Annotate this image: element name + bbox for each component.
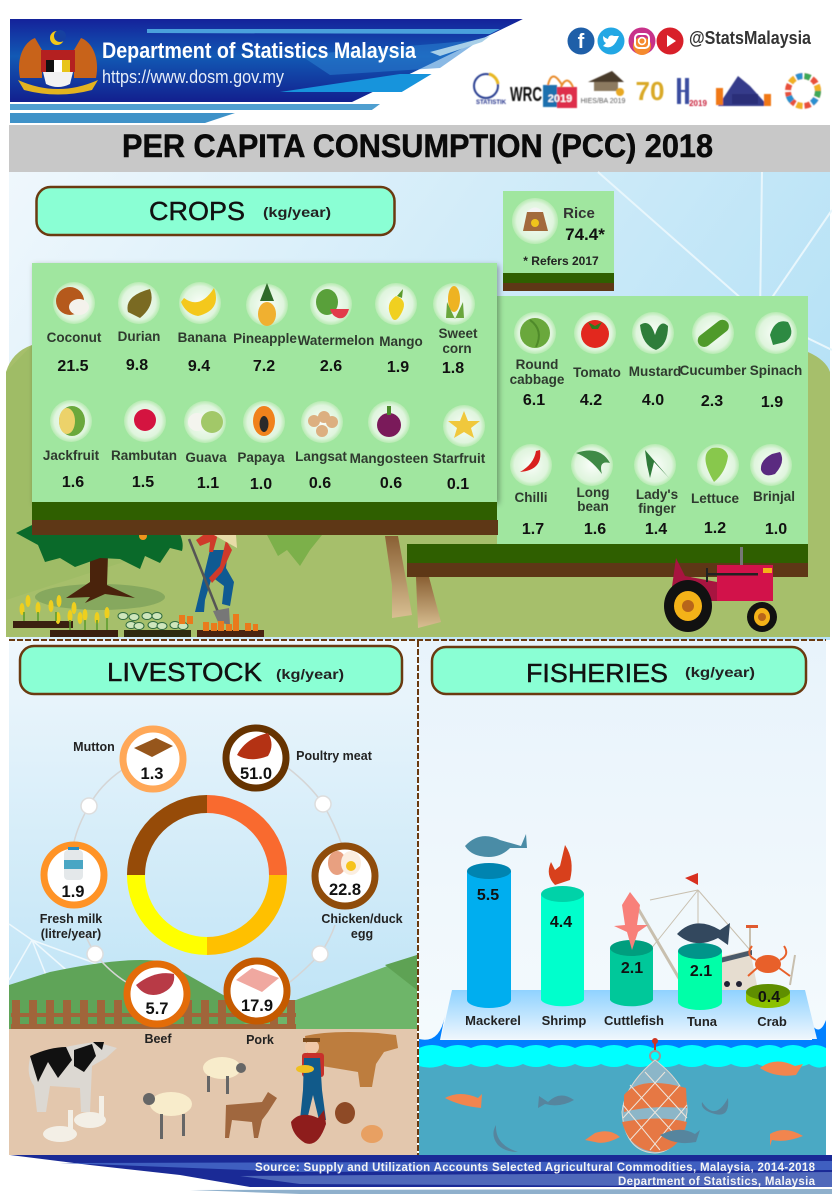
fresh milk xyxy=(40,845,104,941)
scene: farmer with hoe xyxy=(189,533,237,625)
bar chart: fisheries xyxy=(465,834,790,1029)
partner logos row: WRC xyxy=(510,84,542,106)
lady's finger: 1.4 xyxy=(645,521,667,538)
rambutan xyxy=(111,400,177,491)
credit text: Department of Statistics, Malaysia xyxy=(618,1176,816,1188)
lettuce xyxy=(691,444,739,537)
bar: crab: Crab xyxy=(757,1014,787,1029)
long bean: 1.6 xyxy=(584,521,606,538)
heading: crops: CROPS xyxy=(149,196,245,226)
chilli: Chilli xyxy=(514,490,548,505)
sweet corn: corn xyxy=(442,341,472,356)
panel: rice xyxy=(503,191,614,291)
beef: 5.7 xyxy=(146,1000,168,1018)
partner logos row: 2019 xyxy=(548,93,572,105)
social media icons: f xyxy=(578,31,585,53)
round cabbage: 6.1 xyxy=(523,392,545,409)
papaya: Papaya xyxy=(237,450,285,465)
mangosteen: 0.6 xyxy=(380,475,402,492)
sweet corn: 1.8 xyxy=(442,360,464,377)
fish swimming xyxy=(445,1061,803,1152)
bar: shrimp: 4.4 xyxy=(550,914,572,931)
hens xyxy=(291,1102,383,1144)
heading: livestock: LIVESTOCK xyxy=(107,657,263,687)
dashed dividers xyxy=(9,640,826,1155)
partner logos row: STATISTIK xyxy=(476,100,507,106)
chicken/duck egg: 22.8 xyxy=(329,881,361,899)
poultry meat: 51.0 xyxy=(240,765,272,783)
bar: mackerel: Mackerel xyxy=(465,1013,521,1028)
mustard: 4.0 xyxy=(642,392,664,409)
jackfruit: 1.6 xyxy=(62,474,84,491)
mango: Mango xyxy=(379,334,423,349)
partner logos row: 2019 xyxy=(689,99,707,108)
chicken/duck egg xyxy=(315,846,403,941)
brown cow xyxy=(305,1032,398,1087)
spinach: 1.9 xyxy=(761,394,783,411)
brinjal xyxy=(750,444,795,538)
website: https://www.dosm.gov.my xyxy=(102,67,284,87)
mutton: 1.3 xyxy=(141,765,163,783)
animals xyxy=(29,1032,398,1144)
bar: crab: 0.4 xyxy=(758,989,780,1006)
fresh milk: 1.9 xyxy=(62,883,84,901)
fish net with hook xyxy=(622,1038,687,1153)
mutton xyxy=(73,729,183,789)
water xyxy=(419,1015,826,1155)
papaya: 1.0 xyxy=(250,476,272,493)
sheep xyxy=(143,1092,192,1139)
chilli xyxy=(510,444,552,538)
long bean xyxy=(571,444,613,538)
beef: Beef xyxy=(144,1032,172,1046)
round cabbage: cabbage xyxy=(510,372,565,387)
fishing boat xyxy=(636,873,795,1000)
durian: 9.8 xyxy=(126,357,148,374)
farm field xyxy=(6,345,830,637)
jackfruit xyxy=(43,400,100,491)
heading: livestock xyxy=(20,646,402,694)
tomato: Tomato xyxy=(573,365,621,380)
bar: tuna xyxy=(677,923,730,1029)
social handle: @StatsMalaysia xyxy=(689,28,812,48)
starfruit: Starfruit xyxy=(433,451,486,466)
poultry meat xyxy=(226,728,373,788)
spinach xyxy=(750,312,802,411)
guava xyxy=(184,401,227,492)
bar: tuna: Tuna xyxy=(687,1014,718,1029)
heading: fisheries: (kg/year) xyxy=(685,664,755,680)
cucumber xyxy=(680,312,747,410)
long bean: bean xyxy=(577,499,609,514)
watermelon: 2.6 xyxy=(320,358,342,375)
bar: tuna: 2.1 xyxy=(690,963,712,980)
rice value: Rice xyxy=(563,205,595,222)
heading: crops xyxy=(36,187,394,235)
langsat: Langsat xyxy=(295,449,347,464)
panel: vegetables xyxy=(407,296,808,577)
fresh milk: Fresh milk xyxy=(40,912,102,926)
langsat xyxy=(295,401,347,492)
partner logos row: 70 xyxy=(636,76,664,106)
coconut xyxy=(47,282,102,375)
icon: tractor xyxy=(664,547,777,632)
mango xyxy=(375,283,423,376)
tomato xyxy=(573,312,621,409)
heading: fisheries xyxy=(432,647,806,694)
fresh milk: (litre/year) xyxy=(41,927,101,941)
farmer with tray xyxy=(296,1038,326,1120)
mutton: Mutton xyxy=(73,740,115,754)
chilli: 1.7 xyxy=(522,521,544,538)
rambutan: Rambutan xyxy=(111,448,177,463)
source text: Source: Supply and Utilization Accounts Selected Agricultural Commodities, Malaysia, 2014-2018 xyxy=(255,1162,816,1174)
bar: mackerel: 5.5 xyxy=(477,887,499,904)
scene: palm tree xyxy=(267,535,441,628)
cucumber: Cucumber xyxy=(680,363,747,378)
panel: livestock xyxy=(9,640,417,1155)
rice value: 74.4* xyxy=(565,225,605,244)
footer band xyxy=(10,1155,832,1194)
panel: fisheries xyxy=(418,640,826,1040)
title: PER CAPITA CONSUMPTION (PCC) 2018 xyxy=(122,128,713,164)
pork: Pork xyxy=(246,1033,274,1047)
pork xyxy=(227,961,287,1047)
chicken/duck egg: Chicken/duck xyxy=(321,912,403,926)
scene: crop beds xyxy=(13,595,264,637)
hills xyxy=(9,955,417,1029)
bar: cuttlefish: 2.1 xyxy=(621,960,643,977)
lettuce: Lettuce xyxy=(691,491,739,506)
sweet corn xyxy=(433,283,478,377)
panel: fruits xyxy=(32,263,498,535)
coconut: 21.5 xyxy=(57,358,89,375)
mango: 1.9 xyxy=(387,359,409,376)
bar: mackerel xyxy=(465,834,527,1028)
banana: Banana xyxy=(178,330,227,345)
durian xyxy=(118,282,160,374)
pineapple xyxy=(233,283,297,375)
mangosteen xyxy=(350,401,428,492)
brinjal: Brinjal xyxy=(753,489,795,504)
heading: crops: (kg/year) xyxy=(263,204,331,220)
mustard xyxy=(629,312,681,409)
sheep 2 xyxy=(203,1057,246,1094)
partner logos row xyxy=(474,71,818,108)
durian: Durian xyxy=(118,329,160,344)
partner logos row: HIES/BA 2019 xyxy=(581,98,625,105)
round cabbage: Round xyxy=(516,357,558,372)
heading: fisheries: FISHERIES xyxy=(526,658,668,688)
banana: 9.4 xyxy=(188,358,210,375)
geese xyxy=(43,1096,106,1142)
rambutan: 1.5 xyxy=(132,474,154,491)
heading: livestock: (kg/year) xyxy=(276,666,344,682)
jackfruit: Jackfruit xyxy=(43,448,100,463)
sweet corn: Sweet xyxy=(438,326,478,341)
beef xyxy=(127,964,187,1046)
mangosteen: Mangosteen xyxy=(350,451,428,466)
ground xyxy=(9,1029,417,1155)
title bar xyxy=(9,125,830,172)
spinach: Spinach xyxy=(750,363,802,378)
starfruit xyxy=(433,405,486,493)
fence xyxy=(11,1000,296,1029)
starfruit: 0.1 xyxy=(447,476,469,493)
cucumber: 2.3 xyxy=(701,393,723,410)
round cabbage xyxy=(510,312,565,409)
social media icons xyxy=(568,28,684,55)
coconut: Coconut xyxy=(47,330,102,345)
brinjal: 1.0 xyxy=(765,521,787,538)
mustard: Mustard xyxy=(629,364,681,379)
pineapple: Pineapple xyxy=(233,331,297,346)
long bean: Long xyxy=(576,485,610,500)
connecting arc xyxy=(74,768,342,982)
banana xyxy=(178,282,227,375)
lady's finger: finger xyxy=(638,501,676,516)
chicken/duck egg: egg xyxy=(351,927,373,941)
organisation name: Department of Statistics Malaysia xyxy=(102,38,417,63)
lettuce: 1.2 xyxy=(704,520,726,537)
donut chart xyxy=(136,804,278,946)
bar: shrimp xyxy=(541,845,586,1028)
tomato: 4.2 xyxy=(580,392,602,409)
pork: 17.9 xyxy=(241,997,273,1015)
crops section background xyxy=(6,172,832,640)
guava: 1.1 xyxy=(197,475,219,492)
scene: orange tree xyxy=(16,525,183,610)
emblem: coat of arms xyxy=(18,30,98,94)
bar: shrimp: Shrimp xyxy=(542,1013,586,1028)
rice value xyxy=(563,205,605,244)
guava: Guava xyxy=(185,450,227,465)
poultry meat: Poultry meat xyxy=(296,749,373,763)
bar: cuttlefish xyxy=(604,892,664,1028)
rice footnote: * Refers 2017 xyxy=(523,254,599,268)
bar: cuttlefish: Cuttlefish xyxy=(604,1013,664,1028)
bar: crab xyxy=(746,946,790,1029)
icon: rice sack xyxy=(512,198,558,244)
lady's finger xyxy=(634,444,678,538)
header banner xyxy=(10,19,523,123)
lady's finger: Lady's xyxy=(636,487,678,502)
goat xyxy=(225,1092,277,1138)
langsat: 0.6 xyxy=(309,475,331,492)
papaya xyxy=(237,401,285,493)
platform xyxy=(441,990,817,1039)
watermelon xyxy=(298,283,374,375)
cow xyxy=(29,1042,117,1112)
watermelon: Watermelon xyxy=(298,333,374,348)
pineapple: 7.2 xyxy=(253,358,275,375)
